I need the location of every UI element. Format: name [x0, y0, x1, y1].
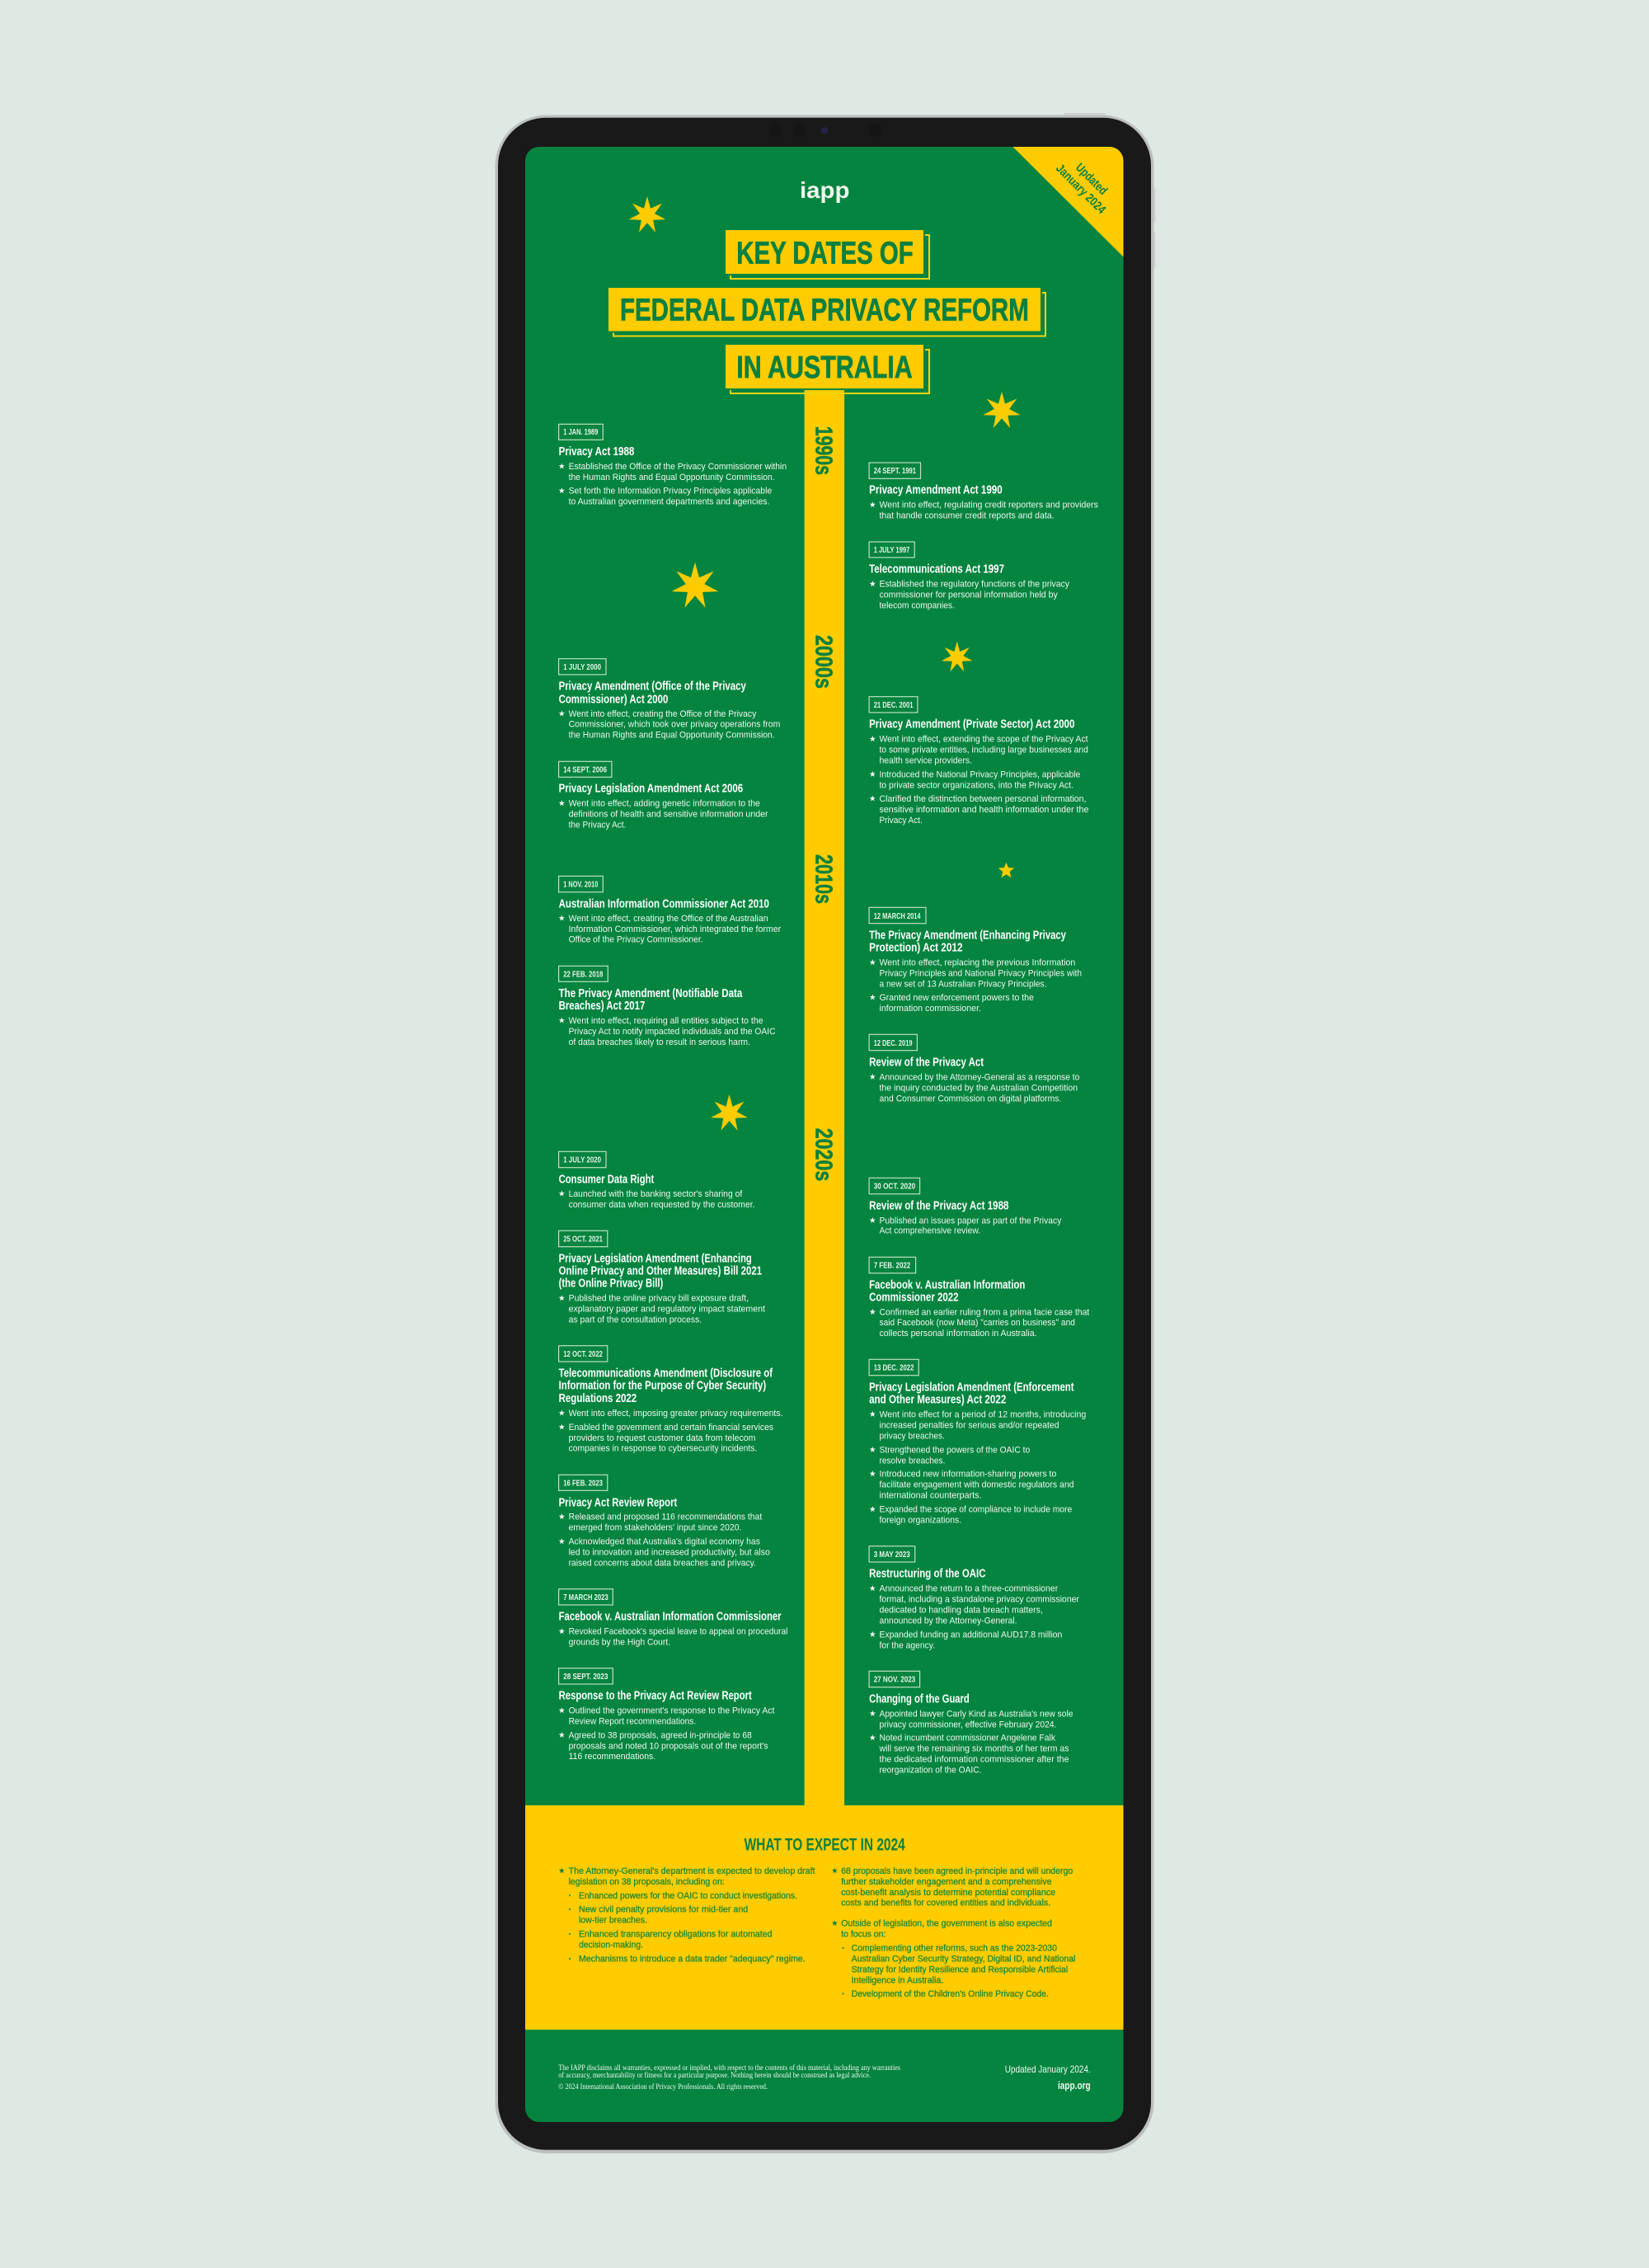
entry: Changing of the Guard [869, 1671, 1073, 1776]
bullet list [870, 580, 1069, 611]
entry title: Consumer Data Right [559, 1173, 654, 1186]
decade label: 1990s: 1990s [810, 426, 836, 475]
bullet list [870, 1709, 1073, 1776]
decorative star: top left [629, 196, 665, 233]
bullet list: Confirmed an earlier ruling from a prima facie case that [879, 1307, 1089, 1317]
bullet list [870, 501, 1098, 521]
bullet list: resolve breaches. [879, 1456, 945, 1466]
date tag [869, 1034, 917, 1051]
bullet list [870, 1409, 1086, 1526]
date tag [559, 876, 603, 892]
entry title: Restructuring of the OAIC [869, 1568, 986, 1581]
bullet list [559, 1627, 787, 1648]
entry title: Privacy Amendment (Office of the Privacy [559, 680, 746, 694]
entry title: Changing of the Guard [869, 1692, 970, 1706]
title line 2 [608, 287, 1045, 336]
date tag: 24 SEPT. 1991 [874, 467, 916, 476]
title line 1: KEY DATES OF [736, 236, 914, 271]
decorative star: right 2000s [942, 642, 973, 671]
right expectations list: Strategy for Identity Resilience and Responsible Artificial [852, 1965, 1068, 1975]
bullet list: Introduced the National Privacy Principles, applicable [879, 769, 1080, 779]
date tag: 30 OCT. 2020 [874, 1183, 916, 1191]
bullet list: Office of the Privacy Commissioner. [569, 935, 703, 945]
bullet list: Published an issues paper as part of the Privacy [879, 1216, 1062, 1226]
entry title: Information for the Purpose of Cyber Security) [559, 1380, 766, 1393]
right expectations list: costs and benefits for covered entities and individuals. [841, 1899, 1050, 1908]
bullet list: Privacy Act. [879, 816, 923, 826]
entry title: Privacy Legislation Amendment (Enhancing [559, 1252, 752, 1265]
bullet list: Introduced new information-sharing powers to [879, 1470, 1056, 1480]
bullet list: announced by the Attorney-General. [879, 1616, 1017, 1626]
left expectations list: The Attorney-General's department is expected to develop draft [569, 1866, 815, 1876]
bullet list: to Australian government departments and agencies. [569, 497, 769, 507]
right expectations list: Australian Cyber Security Strategy, Digital ID, and National [852, 1955, 1075, 1965]
date tag [869, 1359, 918, 1376]
date tag: 1 JULY 2020 [563, 1156, 601, 1165]
bullet list [559, 1016, 776, 1047]
entry title: Facebook v. Australian Information Commissioner [559, 1611, 782, 1624]
bullet list: Announced by the Attorney-General as a response to [879, 1072, 1079, 1082]
bullet list: Privacy Principles and National Privacy Principles with [879, 969, 1082, 979]
entry title [559, 1367, 773, 1405]
entry title [559, 680, 746, 706]
entry title: Telecommunications Act 1997 [869, 563, 1004, 576]
bullet list [870, 1216, 1062, 1236]
date tag: 1 NOV. 2010 [563, 881, 599, 889]
bullet list: Went into effect, requiring all entities subject to the [569, 1016, 763, 1026]
footer [558, 2063, 1091, 2092]
entry: Review of the Privacy Act [869, 1034, 1079, 1103]
decorative star: left 1990s [672, 562, 718, 608]
date tag: 1 JULY 2000 [563, 663, 601, 672]
entry title: Privacy Amendment Act 1990 [869, 484, 1003, 497]
entry title: Privacy Act 1988 [559, 445, 634, 459]
decade label: 2000s: 2000s [810, 635, 836, 689]
bullet list: proposals and noted 10 proposals out of the report's [569, 1741, 768, 1751]
title line 3: IN AUSTRALIA [736, 351, 913, 385]
entry: Consumer Data Right [559, 1151, 755, 1210]
right expectations list: Intelligence in Australia. [852, 1975, 943, 1985]
date tag [869, 1546, 915, 1562]
date tag [869, 697, 918, 713]
entry title: (the Online Privacy Bill) [559, 1278, 663, 1291]
left expectations list: Enhanced powers for the OAIC to conduct investigations. [579, 1891, 797, 1901]
entry title: Protection) Act 2012 [869, 942, 963, 955]
bullet list: Went into effect, adding genetic information to the [569, 799, 760, 809]
bullet list: to private sector organizations, into the Privacy Act. [879, 780, 1073, 790]
bullet list: the Human Rights and Equal Opportunity Commission. [569, 730, 775, 740]
date tag [559, 761, 612, 777]
bullet list [870, 1307, 1089, 1339]
bullet list: Commissioner, which took over privacy operations from [569, 720, 780, 730]
date tag: 12 DEC. 2019 [874, 1039, 913, 1048]
date tag: 25 OCT. 2021 [563, 1235, 603, 1244]
entry: Privacy Amendment (Private Sector) Act 2000 [869, 697, 1088, 826]
decorative star: small five-point right [998, 863, 1014, 878]
panel: what to expect in 2024 [525, 1805, 1123, 2030]
bullet list: the Human Rights and Equal Opportunity Commission. [569, 473, 775, 482]
updated note: Updated January 2024. [1005, 2063, 1091, 2075]
bullet list: Expanded funding an additional AUD17.8 million [879, 1630, 1062, 1640]
bullet list: Released and proposed 116 recommendations that [569, 1513, 762, 1522]
bullet list: Outlined the government's response to the Privacy Act [569, 1706, 774, 1716]
bullet list: 116 recommendations. [569, 1752, 655, 1762]
entry title: Review of the Privacy Act 1988 [869, 1199, 1009, 1212]
bullet list [559, 1706, 774, 1762]
date tag: 28 SEPT. 2023 [563, 1673, 608, 1682]
bullet list: Went into effect, creating the Office of the Privacy [569, 709, 757, 719]
right timeline column [869, 463, 1098, 1776]
bullet list: the dedicated information commissioner after the [879, 1755, 1069, 1765]
title line 1 [725, 229, 929, 279]
bullet list: facilitate engagement with domestic regulators and [879, 1480, 1073, 1490]
bullet list: Went into effect, replacing the previous Information [879, 958, 1075, 968]
section heading: WHAT TO EXPECT IN 2024 [745, 1835, 905, 1854]
entry title: Response to the Privacy Act Review Report [559, 1690, 752, 1703]
bullet list: Privacy Act to notify impacted individuals and the OAIC [569, 1027, 776, 1037]
entry: The Privacy Amendment (Enhancing Privacy Protection) Act 2012 [869, 907, 1082, 1014]
entry title: Privacy Act Review Report [559, 1496, 677, 1509]
bullet list [559, 1189, 755, 1210]
entry title: Facebook v. Australian Information [869, 1278, 1025, 1292]
entry title: Regulations 2022 [559, 1392, 637, 1405]
bullet list [559, 1409, 783, 1454]
bullet list [559, 914, 782, 945]
decade label: 2020s: 2020s [810, 1128, 836, 1181]
right expectations list: Development of the Children's Online Privacy Code. [852, 1989, 1049, 1999]
title line 2: FEDERAL DATA PRIVACY REFORM [620, 294, 1029, 328]
legal disclaimer: © 2024 International Association of Privacy Professionals. All rights reserved. [558, 2082, 768, 2092]
updated corner ribbon [1012, 147, 1124, 257]
entry title: Telecommunications Amendment (Disclosure of [559, 1367, 773, 1381]
bullet list: Granted new enforcement powers to the [879, 993, 1034, 1003]
entry: Response to the Privacy Act Review Report [559, 1668, 774, 1762]
date tag: 27 NOV. 2023 [874, 1676, 916, 1684]
entry title [869, 1278, 1025, 1304]
bullet list [559, 799, 768, 831]
date tag [559, 1346, 608, 1362]
bullet list: collects personal information in Australia. [879, 1329, 1037, 1339]
date tag [559, 1668, 613, 1684]
entry title: Privacy Legislation Amendment Act 2006 [559, 783, 743, 796]
bullet list: commissioner for personal information held by [879, 591, 1058, 600]
left expectations list: New civil penalty provisions for mid-tier and [579, 1905, 748, 1915]
bullet list [870, 735, 1088, 826]
bullet list: Published the online privacy bill exposure draft, [569, 1294, 749, 1304]
entry title [559, 987, 743, 1013]
entry: Restructuring of the OAIC [869, 1546, 1079, 1650]
bullet list: foreign organizations. [879, 1516, 961, 1526]
bullet list: said Facebook (now Meta) "carries on business" and [879, 1318, 1075, 1328]
bullet list: providers to request customer data from telecom [569, 1433, 755, 1443]
bullet list [559, 1294, 765, 1325]
entry title: Privacy Amendment (Private Sector) Act 2000 [869, 718, 1074, 732]
bullet list: definitions of health and sensitive information under [569, 810, 768, 820]
right expectations list: 68 proposals have been agreed in-principle and will undergo [841, 1866, 1073, 1876]
bullet list: consumer data when requested by the customer. [569, 1200, 755, 1210]
decade label: 2010s: 2010s [810, 854, 836, 904]
bullet list [870, 1072, 1079, 1103]
bullet list: privacy breaches. [879, 1431, 945, 1441]
date tag [869, 1257, 916, 1273]
left expectations list: low-tier breaches. [579, 1916, 647, 1926]
date tag [869, 463, 920, 478]
bullet list: Noted incumbent commissioner Angelene Falk [879, 1734, 1055, 1743]
bullet list: and Consumer Commission on digital platforms. [879, 1094, 1061, 1103]
bullet list: grounds by the High Court. [569, 1638, 670, 1648]
title block [608, 229, 1045, 393]
entry title: The Privacy Amendment (Enhancing Privacy [869, 929, 1066, 943]
entry title: Commissioner) Act 2000 [559, 693, 668, 706]
right expectations list: Outside of legislation, the government is also expected [841, 1919, 1052, 1929]
bullet list: the Privacy Act. [569, 821, 626, 831]
date tag [869, 542, 914, 558]
entry: The Privacy Amendment (Notifiable Data Breaches) Act 2017 [559, 966, 776, 1047]
bullet list: will serve the remaining six months of her term as [879, 1744, 1069, 1754]
bullet list: information commissioner. [879, 1004, 981, 1014]
date tag: 7 MARCH 2023 [563, 1593, 608, 1602]
date tag: 16 FEB. 2023 [563, 1480, 603, 1488]
right expectations list: Complementing other reforms, such as the 2023-2030 [852, 1944, 1057, 1954]
bullet list: a new set of 13 Australian Privacy Principles. [879, 980, 1047, 990]
bullet list: Went into effect, creating the Office of the Australian [569, 914, 768, 924]
bullet list: companies in response to cybersecurity incidents. [569, 1444, 757, 1454]
entry: Review of the Privacy Act 1988 [869, 1178, 1062, 1236]
date tag [869, 907, 926, 924]
entry: Telecommunications Act 1997 [869, 542, 1069, 611]
right expectations list: to focus on: [841, 1930, 886, 1940]
bullet list: sensitive information and health information under the [879, 805, 1088, 815]
left expectations list: Mechanisms to introduce a data trader "adequacy" regime. [579, 1955, 806, 1965]
bullet list: Revoked Facebook's special leave to appeal on procedural [569, 1627, 787, 1637]
bullet list: Established the Office of the Privacy Commissioner within [569, 462, 787, 472]
date tag: 13 DEC. 2022 [874, 1364, 914, 1372]
date tag [559, 659, 606, 675]
iapp logo: iapp [800, 177, 849, 203]
decorative star: left 2010s [711, 1094, 748, 1131]
entry: Privacy Amendment (Office of the Privacy Commissioner) Act 2000 [559, 659, 780, 740]
entry: Privacy Amendment Act 1990 [869, 463, 1098, 521]
left timeline column [559, 424, 787, 1762]
date tag [559, 966, 608, 981]
bullet list: Went into effect, imposing greater privacy requirements. [569, 1409, 783, 1419]
bullet list: Act comprehensive review. [879, 1226, 980, 1236]
bullet list: explanatory paper and regulatory impact statement [569, 1305, 765, 1315]
date tag [559, 1589, 613, 1605]
date tag [559, 424, 603, 440]
bullet list: of data breaches likely to result in serious harm. [569, 1038, 750, 1047]
screen panel [525, 147, 1124, 2122]
bullet list: Acknowledged that Australia's digital economy has [569, 1537, 760, 1547]
date tag [869, 1178, 920, 1194]
bullet list: privacy commissioner, effective February 2024. [879, 1720, 1056, 1729]
entry title [869, 1381, 1074, 1406]
date tag: 12 MARCH 2014 [874, 912, 921, 921]
bullet list: Enabled the government and certain financial services [569, 1423, 773, 1433]
entry title [869, 929, 1066, 955]
entry title: Australian Information Commissioner Act 2010 [559, 897, 769, 910]
bullet list: as part of the consultation process. [569, 1315, 702, 1325]
bullet list: dedicated to handling data breach matters, [879, 1605, 1043, 1615]
bullet list: emerged from stakeholders' input since 2020. [569, 1523, 741, 1533]
bullet list: Expanded the scope of compliance to include more [879, 1505, 1072, 1515]
bullet list [559, 709, 780, 740]
date tag [559, 1475, 608, 1490]
date tag: 14 SEPT. 2006 [563, 765, 607, 775]
bullet list: telecom companies. [879, 601, 955, 611]
left expectations list: Enhanced transparency obligations for automated [579, 1930, 773, 1940]
entry: Privacy Legislation Amendment Act 2006 [559, 761, 768, 831]
bullet list: international counterparts. [879, 1491, 981, 1501]
date tag: 21 DEC. 2001 [874, 701, 914, 710]
date tag: 3 MAY 2023 [874, 1550, 910, 1560]
bullet list: Clarified the distinction between personal information, [879, 794, 1087, 804]
date tag [869, 1671, 920, 1687]
bullet list: Review Report recommendations. [569, 1716, 696, 1726]
bullet list: that handle consumer credit reports and data. [879, 511, 1054, 521]
entry title: Breaches) Act 2017 [559, 1000, 645, 1013]
date tag: 12 OCT. 2022 [563, 1350, 603, 1359]
legal disclaimer [558, 2063, 900, 2092]
bullet list: for the agency. [879, 1640, 935, 1650]
bullet list: Went into effect for a period of 12 months, introducing [879, 1409, 1086, 1419]
right expectations list [832, 1866, 1075, 1999]
date tag: 1 JULY 1997 [874, 546, 910, 555]
date tag: 1 JAN. 1989 [563, 428, 599, 437]
entry: Privacy Legislation Amendment (Online Privacy Bill) [559, 1230, 765, 1325]
entry: Facebook v. Australian Information Commissioner [559, 1589, 787, 1648]
bullet list [870, 1584, 1079, 1650]
bullet list [559, 1513, 770, 1569]
entry: Privacy Act Review Report [559, 1475, 770, 1569]
bullet list: format, including a standalone privacy commissioner [879, 1595, 1079, 1605]
left expectations list: decision-making. [579, 1941, 643, 1950]
bullet list: health service providers. [879, 755, 972, 765]
bullet list: the inquiry conducted by the Australian Competition [879, 1083, 1078, 1093]
right expectations list: cost-benefit analysis to determine potential compliance [841, 1888, 1055, 1898]
decorative star: upper right [983, 392, 1021, 428]
entry: Telecommunications Amendment Regulations 2022 [559, 1346, 783, 1454]
bullet list: raised concerns about data breaches and privacy. [569, 1559, 756, 1569]
date tag: 22 FEB. 2018 [563, 970, 604, 980]
bullet list: Set forth the Information Privacy Principles applicable [569, 487, 772, 496]
right expectations list: further stakeholder engagement and a comprehensive [841, 1877, 1052, 1887]
legal disclaimer: of accuracy, merchantability or fitness for a particular purpose. Nothing herein should be construed as legal advice. [558, 2071, 871, 2080]
bullet list: Strengthened the powers of the OAIC to [879, 1445, 1030, 1455]
bullet list: reorganization of the OAIC. [879, 1766, 981, 1776]
entry title: and Other Measures) Act 2022 [869, 1393, 1006, 1406]
bullet list: Appointed lawyer Carly Kind as Australia's new sole [879, 1709, 1073, 1719]
date tag [559, 1230, 608, 1247]
date tag [559, 1151, 606, 1168]
bullet list: Went into effect, regulating credit reporters and providers [879, 501, 1098, 511]
bullet list [559, 462, 787, 507]
entry: Australian Information Commissioner Act 2010 [559, 876, 782, 945]
entry: Privacy Legislation Amendment (Enforcement and Other Measures) Act 2022 [869, 1359, 1086, 1526]
entry title [559, 1252, 762, 1291]
entry title: Privacy Legislation Amendment (Enforcement [869, 1381, 1074, 1394]
bullet list: Announced the return to a three-commissioner [879, 1584, 1059, 1594]
updated corner ribbon: January 2024 [1053, 162, 1109, 217]
bullet list: Information Commissioner, which integrated the former [569, 925, 782, 934]
entry: Privacy Act 1988 [559, 424, 787, 507]
bullet list: Agreed to 38 proposals, agreed in-principle to 68 [569, 1730, 752, 1740]
entry title: Online Privacy and Other Measures) Bill 2021 [559, 1265, 762, 1278]
bullet list: Went into effect, extending the scope of the Privacy Act [879, 735, 1088, 745]
updated corner ribbon: Updated [1073, 161, 1110, 198]
tablet device frame [495, 113, 1156, 2153]
bullet list: to some private entities, including large businesses and [879, 746, 1088, 755]
timeline spine [805, 388, 844, 1807]
title line 3 [725, 344, 929, 393]
entry: Facebook v. Australian Information Commissioner 2022 [869, 1257, 1089, 1339]
bullet list: increased penalties for serious and/or repeated [879, 1420, 1059, 1430]
entry title: The Privacy Amendment (Notifiable Data [559, 987, 743, 1000]
entry title: Review of the Privacy Act [869, 1056, 984, 1069]
legal disclaimer: The IAPP disclaims all warranties, expressed or implied, with respect to the contents of this material, including any warranties [558, 2063, 900, 2073]
website: iapp.org [1058, 2080, 1091, 2092]
left expectations list [559, 1866, 815, 1965]
bullet list: led to innovation and increased productivity, but also [569, 1548, 770, 1558]
bullet list: Established the regulatory functions of the privacy [879, 580, 1069, 590]
entry title: Commissioner 2022 [869, 1291, 958, 1304]
bullet list: Launched with the banking sector's sharing of [569, 1189, 743, 1199]
left expectations list: legislation on 38 proposals, including on: [569, 1877, 725, 1887]
date tag: 7 FEB. 2022 [874, 1262, 911, 1270]
bullet list [870, 958, 1082, 1014]
